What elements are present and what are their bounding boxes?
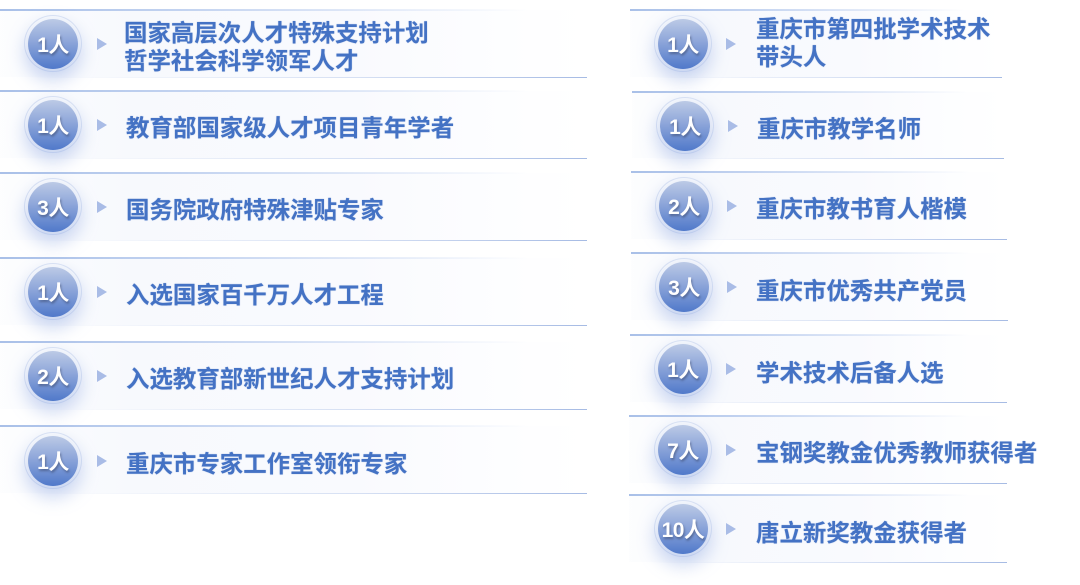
text: award name: 重庆市专家工作室领衔专家 xyxy=(126,451,407,477)
badge: 3 people xyxy=(28,182,78,232)
text: award name: 入选教育部新世纪人才支持计划 xyxy=(126,366,454,392)
text: award name: 重庆市教书育人楷模 xyxy=(756,196,967,222)
badge: 2 people xyxy=(659,181,709,231)
badge: 1 person: 1人 xyxy=(667,34,699,57)
badge: 1 person xyxy=(28,100,78,150)
icon: arrow xyxy=(727,281,737,293)
icon: arrow xyxy=(728,120,738,132)
icon: arrow xyxy=(97,286,107,298)
text: award name: 入选国家百千万人才工程 xyxy=(126,282,384,308)
text: award name: 重庆市第四批学术技术 xyxy=(756,16,990,42)
panel: right row 6 xyxy=(629,415,1037,494)
badge: 1 person xyxy=(660,101,710,151)
panel: left row 2 xyxy=(0,90,587,169)
text: award name: 国务院政府特殊津贴专家 xyxy=(126,197,384,223)
icon: arrow xyxy=(726,363,736,375)
badge: 3 people xyxy=(659,262,709,312)
panel: right row 4 xyxy=(631,252,1008,331)
panel: right row 7 xyxy=(629,494,1007,573)
text: award name: 国家高层次人才特殊支持计划 xyxy=(124,20,429,46)
text: award name: 宝钢奖教金优秀教师获得者 xyxy=(756,440,1037,466)
icon: arrow xyxy=(97,119,107,131)
icon: arrow xyxy=(726,523,736,535)
icon: arrow xyxy=(97,455,107,467)
badge: 1 person xyxy=(658,344,708,394)
badge: 2 people xyxy=(28,351,78,401)
text: award name: 学术技术后备人选 xyxy=(756,360,944,386)
panel: right row 3 xyxy=(631,171,1007,250)
icon: arrow xyxy=(726,38,736,50)
text: award name: 重庆市教学名师 xyxy=(757,116,921,142)
icon: arrow xyxy=(97,370,107,382)
badge: 1 person: 1人 xyxy=(37,451,69,474)
badge: 1 person: 1人 xyxy=(37,115,69,138)
text: award name: 教育部国家级人才项目青年学者 xyxy=(126,115,454,141)
text: award name: 带头人 xyxy=(756,44,826,70)
badge: 10 people xyxy=(658,504,708,554)
panel: right row 5 xyxy=(630,334,1007,413)
badge: 1 person xyxy=(28,267,78,317)
panel: left row 6 xyxy=(0,425,587,505)
panel: left row 5 xyxy=(0,341,587,420)
icon: arrow xyxy=(726,444,736,456)
panel: left row 1 xyxy=(0,9,587,88)
text: award name: 哲学社会科学领军人才 xyxy=(124,48,358,74)
text: award name: 唐立新奖教金获得者 xyxy=(756,520,967,546)
badge: 7 people: 7人 xyxy=(667,440,699,463)
badge: 3 people: 3人 xyxy=(668,277,700,300)
icon: arrow xyxy=(727,200,737,212)
panel: right row 2 xyxy=(632,91,1004,170)
badge: 1 person xyxy=(658,19,708,69)
text: award name xyxy=(124,20,429,74)
badge: 1 person: 1人 xyxy=(37,282,69,305)
badge: 10 people: 10人 xyxy=(662,519,704,542)
badge: 2 people: 2人 xyxy=(37,366,69,389)
icon: arrow xyxy=(97,201,107,213)
text: award name: 重庆市优秀共产党员 xyxy=(756,278,967,304)
panel: left row 3 xyxy=(0,172,587,251)
badge: 3 people: 3人 xyxy=(37,197,69,220)
text: award name xyxy=(756,16,990,70)
icon: arrow xyxy=(97,38,107,50)
badge: 1 person xyxy=(28,19,78,69)
panel: right row 1 xyxy=(630,9,1002,88)
badge: 7 people xyxy=(658,425,708,475)
badge: 1 person: 1人 xyxy=(667,359,699,382)
badge: 1 person: 1人 xyxy=(37,34,69,57)
badge: 2 people: 2人 xyxy=(668,196,700,219)
panel: left row 4 xyxy=(0,257,587,336)
badge: 1 person xyxy=(28,436,78,486)
badge: 1 person: 1人 xyxy=(669,116,701,139)
